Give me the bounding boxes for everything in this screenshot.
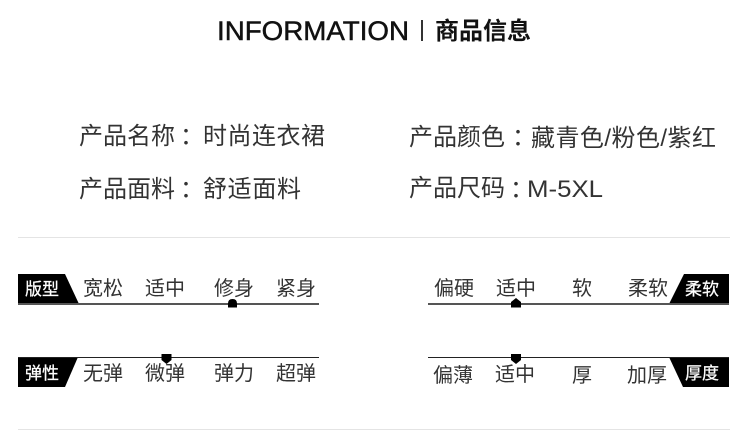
product sizes [409,175,603,203]
product colours: 藏青色/粉色/紫红 [531,125,716,152]
fit options [83,277,316,300]
softness options: 适中 [496,277,536,300]
softness options: 偏硬 [434,277,474,300]
softness options: 软 [572,277,592,300]
tag: softness: 柔软 [685,280,719,299]
product colours: ： [512,124,536,151]
product sizes: M-5XL [527,176,603,203]
product material: 舒适面料 [203,176,301,203]
marker: softness [511,298,521,308]
softness options [434,277,668,300]
fit options: 适中 [145,277,185,300]
elasticity options [83,362,316,385]
title: 商品信息 [435,18,531,45]
title [217,16,531,46]
marker: elasticity [162,354,172,364]
tag: elasticity [18,357,78,387]
product name: 时尚连衣裙 [203,123,325,150]
fit options: 紧身 [276,277,316,300]
fit options: 修身 [214,277,254,300]
tag: fit: 版型 [25,280,59,299]
tag: thickness [669,357,729,387]
thickness options [433,363,667,387]
fit options: 宽松 [83,277,123,300]
marker: thickness [511,354,521,364]
product name: ： [180,123,204,150]
elasticity options: 无弹 [83,362,123,385]
product name [79,123,325,150]
elasticity options: 弹力 [214,362,254,385]
thickness options: 适中 [495,363,535,386]
scale: fit [18,274,319,308]
scale: thickness [428,354,729,387]
product material: ： [180,176,204,203]
tag: thickness: 厚度 [685,364,719,383]
thickness options: 偏薄 [433,364,473,387]
product colours [409,124,716,152]
product colours: 产品颜色 [409,124,505,151]
product name: 产品名称 [79,123,175,150]
product material [79,176,301,203]
title: INFORMATION [217,16,409,46]
product sizes: 产品尺码 [409,175,505,202]
scale: elasticity [18,354,319,387]
tag: fit [18,274,79,304]
product info text block [79,123,716,203]
thickness options: 厚 [572,365,592,387]
tag: softness [669,274,729,304]
marker: fit [228,299,237,308]
thickness options: 加厚 [627,364,667,387]
tag: elasticity: 弹性 [25,364,59,383]
product sizes: ： [510,176,534,203]
softness options: 柔软 [628,277,668,300]
scale: softness [428,274,729,308]
product material: 产品面料 [79,176,175,203]
elasticity options: 超弹 [276,362,316,385]
elasticity options: 微弹 [145,362,185,385]
